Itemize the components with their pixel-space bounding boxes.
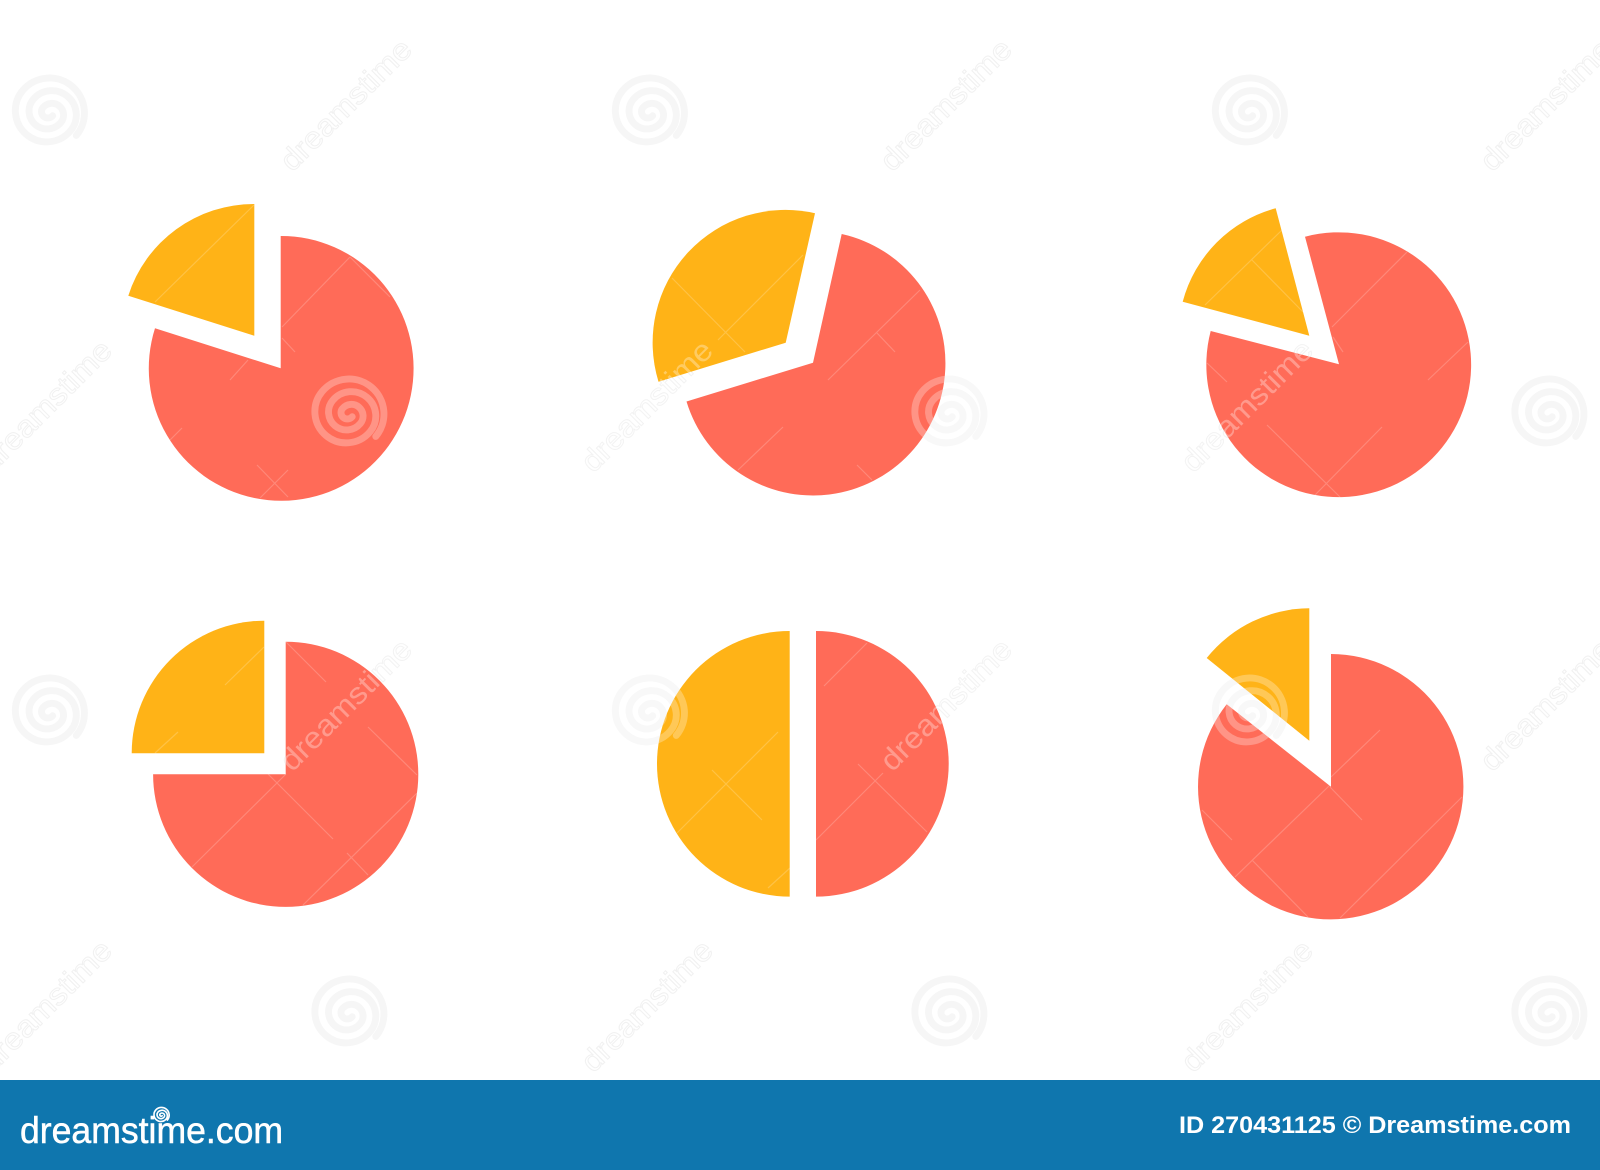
footer credit: image id: ID 270431125 © Dreamstime.com: [1179, 1112, 1571, 1139]
pie chart 6: row 2 right: [1198, 608, 1463, 919]
pie chart 2: row 1 centre: [653, 210, 945, 495]
watermark layer: translucent white marks over the pies: dreamstime: [874, 633, 1019, 778]
pie chart 4: row 2 left: [132, 621, 418, 907]
watermark layer: faint grey marks on white: dreamstime: [575, 934, 720, 1079]
watermark layer: translucent white marks over the pies: dreamstime: [575, 334, 720, 479]
watermark layer: translucent white marks over the pies: dreamstime: [1175, 334, 1320, 479]
watermark layer: faint grey marks on white: dreamstime: [274, 33, 419, 178]
watermark layer: translucent white marks over the pies: [155, 205, 1468, 918]
watermark layer: faint grey marks on white: dreamstime: [575, 334, 720, 479]
watermark layer: faint grey marks on white: dreamstime: [1175, 934, 1320, 1079]
pie chart 5: row 2 centre: [657, 631, 949, 897]
watermark layer: faint grey marks on white: dreamstime: [874, 633, 1019, 778]
watermark layer: faint grey marks on white: dreamstime: [874, 33, 1019, 178]
pie chart 3: row 1 right: [1183, 208, 1471, 497]
footer bar: [0, 1080, 1600, 1170]
watermark layer: faint grey marks on white: dreamstime: [274, 633, 419, 778]
pie chart 1: row 1 left: [128, 204, 414, 501]
watermark layer: translucent white marks over the pies: dreamstime: [274, 633, 419, 778]
footer logo: dreamstime.com: dreamstime.com: [20, 1110, 283, 1151]
watermark layer: faint grey marks on white: dreamstime: [1175, 334, 1320, 479]
